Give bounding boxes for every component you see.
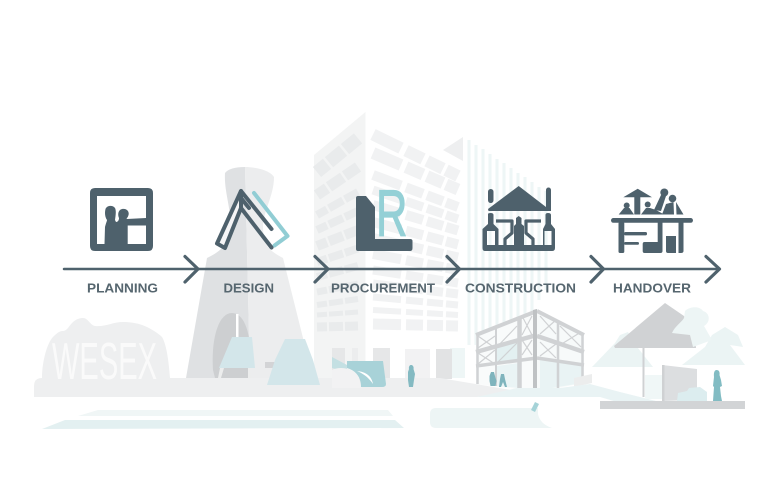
boulder lettering: WESEX	[52, 333, 157, 391]
foreground tree	[672, 307, 712, 347]
sculpture	[332, 357, 386, 388]
label: handover: HANDOVER	[613, 280, 692, 296]
icon: procurement: R	[376, 176, 407, 250]
trees	[592, 327, 745, 399]
slab	[600, 401, 745, 409]
pavilion	[614, 303, 712, 397]
lamps	[218, 337, 320, 385]
water stripes	[42, 410, 404, 429]
visitor	[713, 370, 722, 401]
car	[677, 387, 707, 401]
icon: handover	[611, 188, 693, 253]
icon: design	[217, 191, 288, 248]
label: planning: PLANNING	[87, 280, 158, 296]
striped building	[443, 137, 546, 378]
panel: background scene	[34, 112, 745, 429]
construction people	[490, 372, 507, 387]
frame building under construction	[476, 309, 592, 392]
label: construction: CONSTRUCTION	[465, 280, 576, 296]
teal marker	[531, 402, 539, 412]
timeline arrow	[64, 256, 720, 282]
pale bench	[430, 408, 552, 428]
label: design: DESIGN	[224, 280, 274, 296]
wall	[662, 365, 697, 401]
label: procurement: PROCUREMENT	[331, 280, 435, 296]
boulder sign	[42, 318, 170, 391]
ground band	[34, 378, 517, 397]
pale ground right	[477, 384, 660, 402]
person	[408, 365, 415, 387]
icon: procurement	[356, 176, 412, 251]
icon: planning	[90, 188, 153, 251]
icon: construction	[482, 186, 555, 251]
cooling tower	[186, 167, 313, 378]
office tower	[314, 112, 458, 380]
